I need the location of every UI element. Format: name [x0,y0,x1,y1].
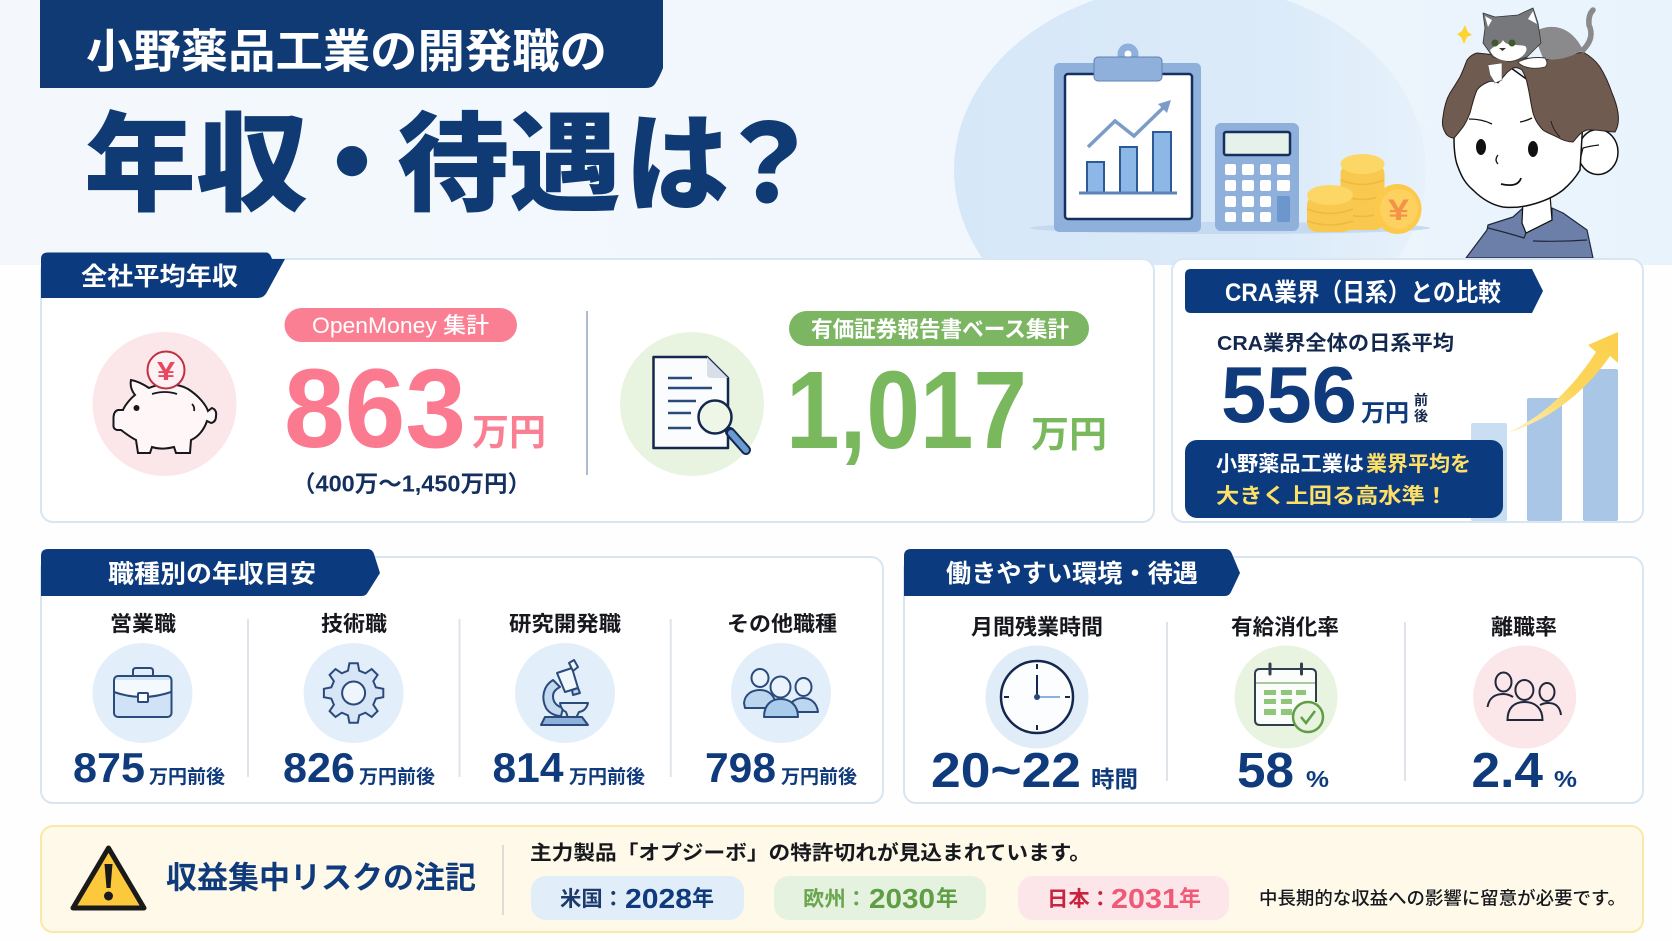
tab heading: company average: 全社平均年収 [81,263,238,291]
illustration: person with cat [1442,8,1618,258]
CRA average value: 前 [1414,392,1428,408]
CRA average value: CRA業界全体の日系平均 [1217,332,1454,355]
risk description: 主力製品「オプジーボ」の特許切れが見込まれています。 [530,840,1091,864]
main title: 年収 [84,104,308,225]
item: paid leave: 有給消化率 [1231,616,1339,640]
item: turnover: 2.4 [1472,744,1543,798]
item: sales [73,613,225,791]
securities report value: 有価証券報告書ベース集計 [811,317,1069,342]
item: other jobs [705,613,857,791]
tab heading: work environment [904,549,1240,596]
main title: は [625,104,729,225]
main title: ・ [298,104,406,225]
item: research and development [492,613,645,791]
item: sales: 875 [73,744,145,791]
CRA average value [1217,332,1454,439]
securities report value: 1,017 [786,349,1027,472]
icon: document with magnifier [620,332,764,476]
panel: company average salary [41,252,1154,522]
callout: high standard [1185,440,1503,518]
tab heading: CRA: CRA業界（日系）との比較 [1225,279,1501,307]
item: overtime: 月間残業時間 [971,616,1103,640]
OpenMoney value: OpenMoney 集計 [312,313,489,338]
OpenMoney value [284,308,546,496]
pill: Europe 2030: 欧州： [803,888,867,911]
pill: Europe 2030: 2030 [869,883,935,914]
item: engineering [283,612,435,791]
OpenMoney value: 万円 [472,412,546,453]
item: paid leave: 58 [1237,744,1294,798]
icon: piggy bank [92,332,236,476]
OpenMoney value: 863 [284,346,466,471]
callout: high standard: 大きく上回る高水準！ [1216,485,1448,508]
main title: 待遇 [397,104,621,225]
pill: USA 2028 [531,876,744,920]
securities report value [786,311,1107,472]
panel: work environment [904,549,1643,803]
panel: revenue concentration risk note [41,826,1643,932]
item: turnover: 離職率 [1491,616,1557,640]
panel: CRA comparison [1172,259,1643,522]
risk heading: 収益集中リスクの注記 [166,860,476,896]
tab heading: CRA [1185,269,1543,313]
pill: Japan 2031: 日本： [1047,888,1111,911]
panel: salary by job type [41,549,883,803]
item: overtime [931,616,1138,798]
tab heading: work environment: 働きやすい環境・待遇 [946,560,1198,588]
item: research and development: 研究開発職 [509,613,621,636]
item: engineering: 万円前後 [359,766,435,788]
icon: warning triangle [73,848,144,908]
main title [84,104,822,225]
pill: Europe 2030: 年 [936,886,958,911]
callout: high standard: 小野薬品工業は [1216,453,1364,476]
item: overtime: 20~22 [931,744,1081,798]
main title: ？ [714,104,822,225]
item: research and development: 814 [492,744,564,791]
item: other jobs: 798 [705,744,776,791]
OpenMoney value: （400万～1,450万円） [292,470,531,496]
bar chart with rising arrow [1471,332,1618,521]
illustration: coins [1307,154,1422,234]
tab heading: job types: 職種別の年収目安 [108,560,316,588]
illustration: clipboard with chart [1030,44,1430,234]
item: paid leave [1231,616,1339,798]
tab heading: company average [41,252,285,298]
item: research and development: 万円前後 [569,766,645,788]
title banner [40,0,663,88]
illustration: calculator [1215,123,1299,231]
pill: USA 2028: 年 [692,886,714,911]
icon: piggy bank: ¥ [157,356,176,386]
note: mid-to-long-term impact: 中長期的な収益への影響に留意が必要です。 [1259,888,1626,908]
pill: Japan 2031: 年 [1179,886,1201,911]
item: other jobs: その他職種 [727,613,837,636]
CRA average value: 後 [1414,408,1428,424]
item: other jobs: 万円前後 [781,766,857,788]
CRA average value: 556 [1221,350,1357,439]
item: overtime: 時間 [1091,766,1138,792]
item: turnover: % [1554,766,1577,792]
item: paid leave: % [1306,766,1329,792]
item: engineering: 技術職 [321,612,387,636]
title banner: 小野薬品工業の開発職の [86,26,607,78]
pill: USA 2028: 米国： [560,888,624,911]
pill: Japan 2031: 2031 [1111,883,1179,914]
securities report value: 万円 [1031,414,1107,455]
pill: USA 2028: 2028 [625,883,692,914]
item: engineering: 826 [283,744,355,791]
item: sales: 営業職 [110,613,176,636]
callout: high standard: 業界平均を [1366,453,1471,476]
pill: Europe 2030 [774,876,986,920]
item: turnover [1472,616,1577,798]
item: sales: 万円前後 [149,766,225,788]
tab heading: job types [41,549,380,596]
pill: Japan 2031 [1018,876,1229,920]
illustration: coins: ¥ [1388,194,1409,227]
CRA average value: 万円 [1361,400,1409,427]
